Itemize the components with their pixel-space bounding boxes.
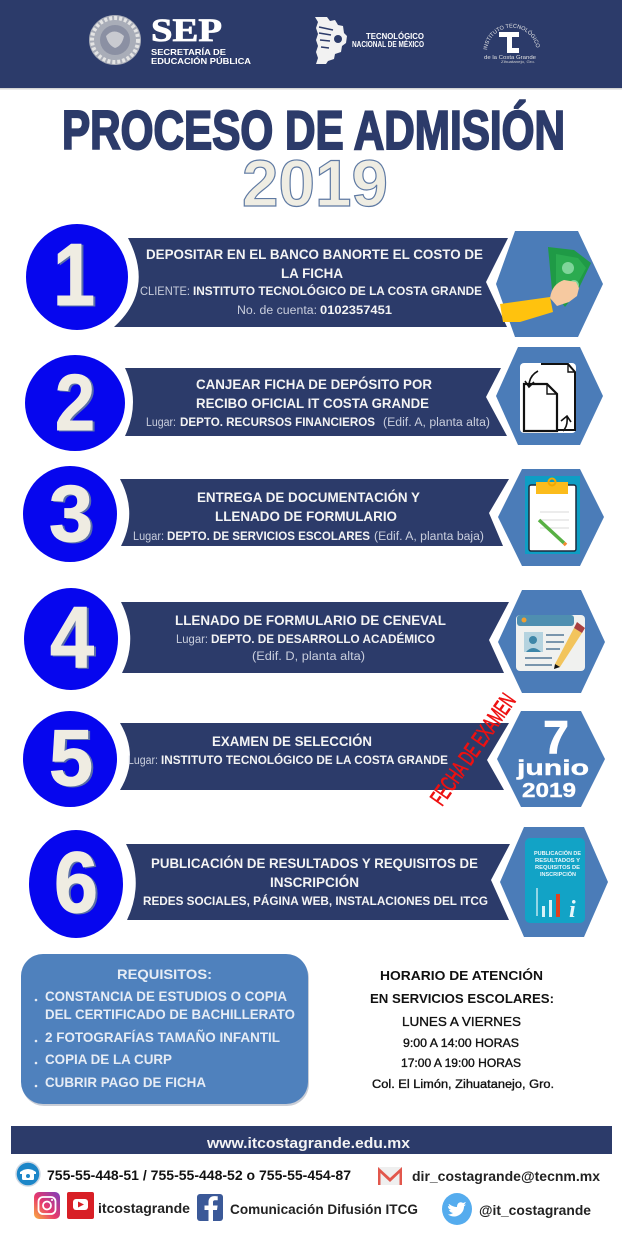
text block 4 xyxy=(175,613,446,663)
text block 5: EXAMEN DE SELECCIÓN xyxy=(212,734,372,749)
logo: Tecnológico Nacional de México: TECNOLÓGICO xyxy=(366,32,424,41)
text block 2: (Edif. A, planta alta) xyxy=(383,417,490,429)
text block 2: RECIBO OFICIAL IT COSTA GRANDE xyxy=(196,396,429,411)
text block 6 xyxy=(143,856,488,908)
number badge 3: 3 xyxy=(49,469,93,558)
panel: requisitos xyxy=(21,954,309,1106)
logo: SEP wordmark: SECRETARÍA DE xyxy=(151,47,226,57)
text block 5: INSTITUTO TECNOLÓGICO DE LA COSTA GRANDE xyxy=(161,754,448,767)
icon: results chart xyxy=(525,838,585,923)
step 6 xyxy=(29,827,608,938)
number badge 1 xyxy=(26,224,128,330)
hexagon 1 xyxy=(496,231,603,337)
logo: Instituto Tecnológico de la Costa Grande: INSTITUTO TECNOLÓGICO xyxy=(483,24,540,50)
text block: horario xyxy=(370,968,554,1091)
text block 3 xyxy=(133,490,484,543)
number badge 4: 4 xyxy=(52,590,96,687)
number badge 2 xyxy=(25,355,125,451)
text block 4: Lugar: xyxy=(176,634,208,646)
text block 5 xyxy=(128,734,448,767)
text block 1: 0102357451 xyxy=(320,303,392,317)
number badge 5 xyxy=(23,711,117,807)
number badge 1: 1 xyxy=(53,225,95,324)
text block: horario: 9:00 A 14:00 HORAS xyxy=(403,1038,519,1050)
logo: Tecnológico Nacional de México: NACIONAL DE MÉXICO xyxy=(352,40,424,49)
text block 1: DEPOSITAR EN EL BANCO BANORTE EL COSTO DE xyxy=(146,247,483,262)
text block 1: CLIENTE: xyxy=(140,286,190,298)
number badge 1: 1 xyxy=(55,226,97,325)
icon: results chart: PUBLICACIÓN DE xyxy=(534,849,582,857)
list: requirements: CUBRIR PAGO DE FICHA xyxy=(45,1075,206,1090)
number badge 4 xyxy=(24,588,118,690)
phone numbers: 755-55-448-51 / 755-55-448-52 o 755-55-454-87 xyxy=(47,1167,351,1183)
number badge 4: 4 xyxy=(50,589,94,686)
list: requirements: COPIA DE LA CURP xyxy=(45,1052,172,1067)
hexagon 3 xyxy=(498,469,604,566)
text block 4: (Edif. D, planta alta) xyxy=(252,651,365,663)
text block 6: PUBLICACIÓN DE RESULTADOS Y REQUISITOS DE xyxy=(151,856,478,871)
logo: Tecnológico Nacional de México xyxy=(315,17,424,64)
icon: results chart: RESULTADOS Y xyxy=(535,858,581,864)
logo: SEP wordmark xyxy=(151,13,251,66)
icon: phone xyxy=(16,1162,40,1186)
text block 1 xyxy=(140,247,483,317)
heading: requisitos: REQUISITOS: xyxy=(117,966,212,982)
text block 2 xyxy=(146,377,490,429)
number badge 2: 2 xyxy=(57,359,97,448)
ribbon 5 xyxy=(120,723,509,790)
hexagon 4 xyxy=(498,590,605,693)
exam date: 2019 xyxy=(522,780,576,802)
website bar: www.itcostagrande.edu.mx xyxy=(206,1135,411,1152)
text block 1: LA FICHA xyxy=(281,266,343,281)
icon: gmail xyxy=(378,1167,402,1185)
number badge 2: 2 xyxy=(55,358,95,447)
list: requirements: CONSTANCIA DE ESTUDIOS O COPIA xyxy=(45,989,287,1004)
step 5 xyxy=(23,688,605,810)
number badge 5: 5 xyxy=(51,714,95,803)
icon: results chart: INSCRIPCIÓN xyxy=(540,870,576,878)
list: requirements xyxy=(35,989,295,1090)
website bar xyxy=(11,1126,612,1154)
text block 6: REDES SOCIALES, PÁGINA WEB, INSTALACIONES DEL ITCG xyxy=(143,895,488,908)
logo: SEP seal xyxy=(89,15,141,65)
logo: SEP wordmark: SEP xyxy=(151,13,222,49)
step 3 xyxy=(23,466,604,566)
hexagon 2 xyxy=(496,347,603,445)
text block 4: DEPTO. DE DESARROLLO ACADÉMICO xyxy=(211,633,435,646)
text block: horario: EN SERVICIOS ESCOLARES: xyxy=(370,991,554,1006)
number badge 6 xyxy=(29,830,123,938)
icon: facebook xyxy=(197,1194,223,1221)
number badge 3 xyxy=(23,466,117,562)
step 2 xyxy=(25,347,603,451)
exam date: junio xyxy=(516,757,589,780)
icon: youtube xyxy=(67,1192,94,1219)
icon: documents xyxy=(520,363,576,433)
handle: twitter: @it_costagrande xyxy=(479,1202,591,1218)
hexagon 6 xyxy=(500,827,608,937)
text block 5: Lugar: xyxy=(128,755,158,767)
header band xyxy=(0,0,622,90)
logo: Instituto Tecnológico de la Costa Grande: de la Costa Grande xyxy=(484,55,536,61)
exam date: 7 xyxy=(543,711,569,763)
text block: horario: LUNES A VIERNES xyxy=(402,1014,521,1029)
number badge 6: 6 xyxy=(56,836,100,932)
text block 3: Lugar: xyxy=(133,531,164,543)
text block: horario: HORARIO DE ATENCIÓN xyxy=(380,968,543,983)
text block 3: (Edif. A, planta baja) xyxy=(374,531,484,543)
year: 2019 xyxy=(242,146,388,220)
handle: Comunicación Difusión ITCG: Comunicación Difusión ITCG xyxy=(230,1201,418,1217)
icon: hand with money xyxy=(500,247,591,322)
icon: results chart: REQUISITOS DE xyxy=(535,865,581,871)
step 4 xyxy=(24,588,605,693)
text block 2: CANJEAR FICHA DE DEPÓSITO POR xyxy=(196,377,432,392)
number badge 3: 3 xyxy=(51,470,95,559)
list: requirements: 2 FOTOGRAFÍAS TAMAÑO INFANTIL xyxy=(45,1030,280,1045)
text block 1: INSTITUTO TECNOLÓGICO DE LA COSTA GRANDE xyxy=(193,285,482,298)
text block 1: No. de cuenta: xyxy=(237,305,317,317)
text block: horario: 17:00 A 19:00 HORAS xyxy=(401,1058,521,1070)
icon: twitter xyxy=(442,1193,472,1225)
ribbon 6 xyxy=(126,844,510,920)
ribbon 4 xyxy=(121,602,509,673)
icon: instagram xyxy=(34,1192,60,1219)
text block 3: DEPTO. DE SERVICIOS ESCOLARES xyxy=(167,531,370,543)
icon: results chart: i xyxy=(569,897,576,923)
icon: form with pencil xyxy=(516,615,585,671)
logo: SEP wordmark: EDUCACIÓN PÚBLICA xyxy=(151,55,251,66)
list: requirements: DEL CERTIFICADO DE BACHILLERATO xyxy=(45,1007,295,1022)
logo: Instituto Tecnológico de la Costa Grande: Zihuatanejo, Gro. xyxy=(501,60,535,64)
text block: horario: Col. El Limón, Zihuatanejo, Gro. xyxy=(372,1079,554,1091)
text block 3: LLENADO DE FORMULARIO xyxy=(215,509,397,524)
ribbon 2 xyxy=(125,368,507,436)
handle: itcostagrande: itcostagrande xyxy=(98,1200,190,1216)
exam date label: FECHA DE EXAMEN xyxy=(425,688,521,810)
hexagon 5 xyxy=(497,711,605,807)
text block 3: ENTREGA DE DOCUMENTACIÓN Y xyxy=(197,490,420,505)
number badge 5: 5 xyxy=(49,713,93,802)
email: dir_costagrande@tecnm.mx xyxy=(412,1168,600,1184)
exam date xyxy=(516,711,589,802)
ribbon 3 xyxy=(120,479,509,546)
number badge 6: 6 xyxy=(54,835,98,931)
text block 6: INSCRIPCIÓN xyxy=(270,875,359,890)
icon: clipboard xyxy=(525,476,580,554)
logo: Instituto Tecnológico de la Costa Grande xyxy=(483,24,540,64)
ribbon 1 xyxy=(114,238,508,327)
text block 2: DEPTO. RECURSOS FINANCIEROS xyxy=(180,417,375,429)
text block 4: LLENADO DE FORMULARIO DE CENEVAL xyxy=(175,613,446,628)
text block 2: Lugar: xyxy=(146,417,176,429)
step 1 xyxy=(26,224,603,337)
